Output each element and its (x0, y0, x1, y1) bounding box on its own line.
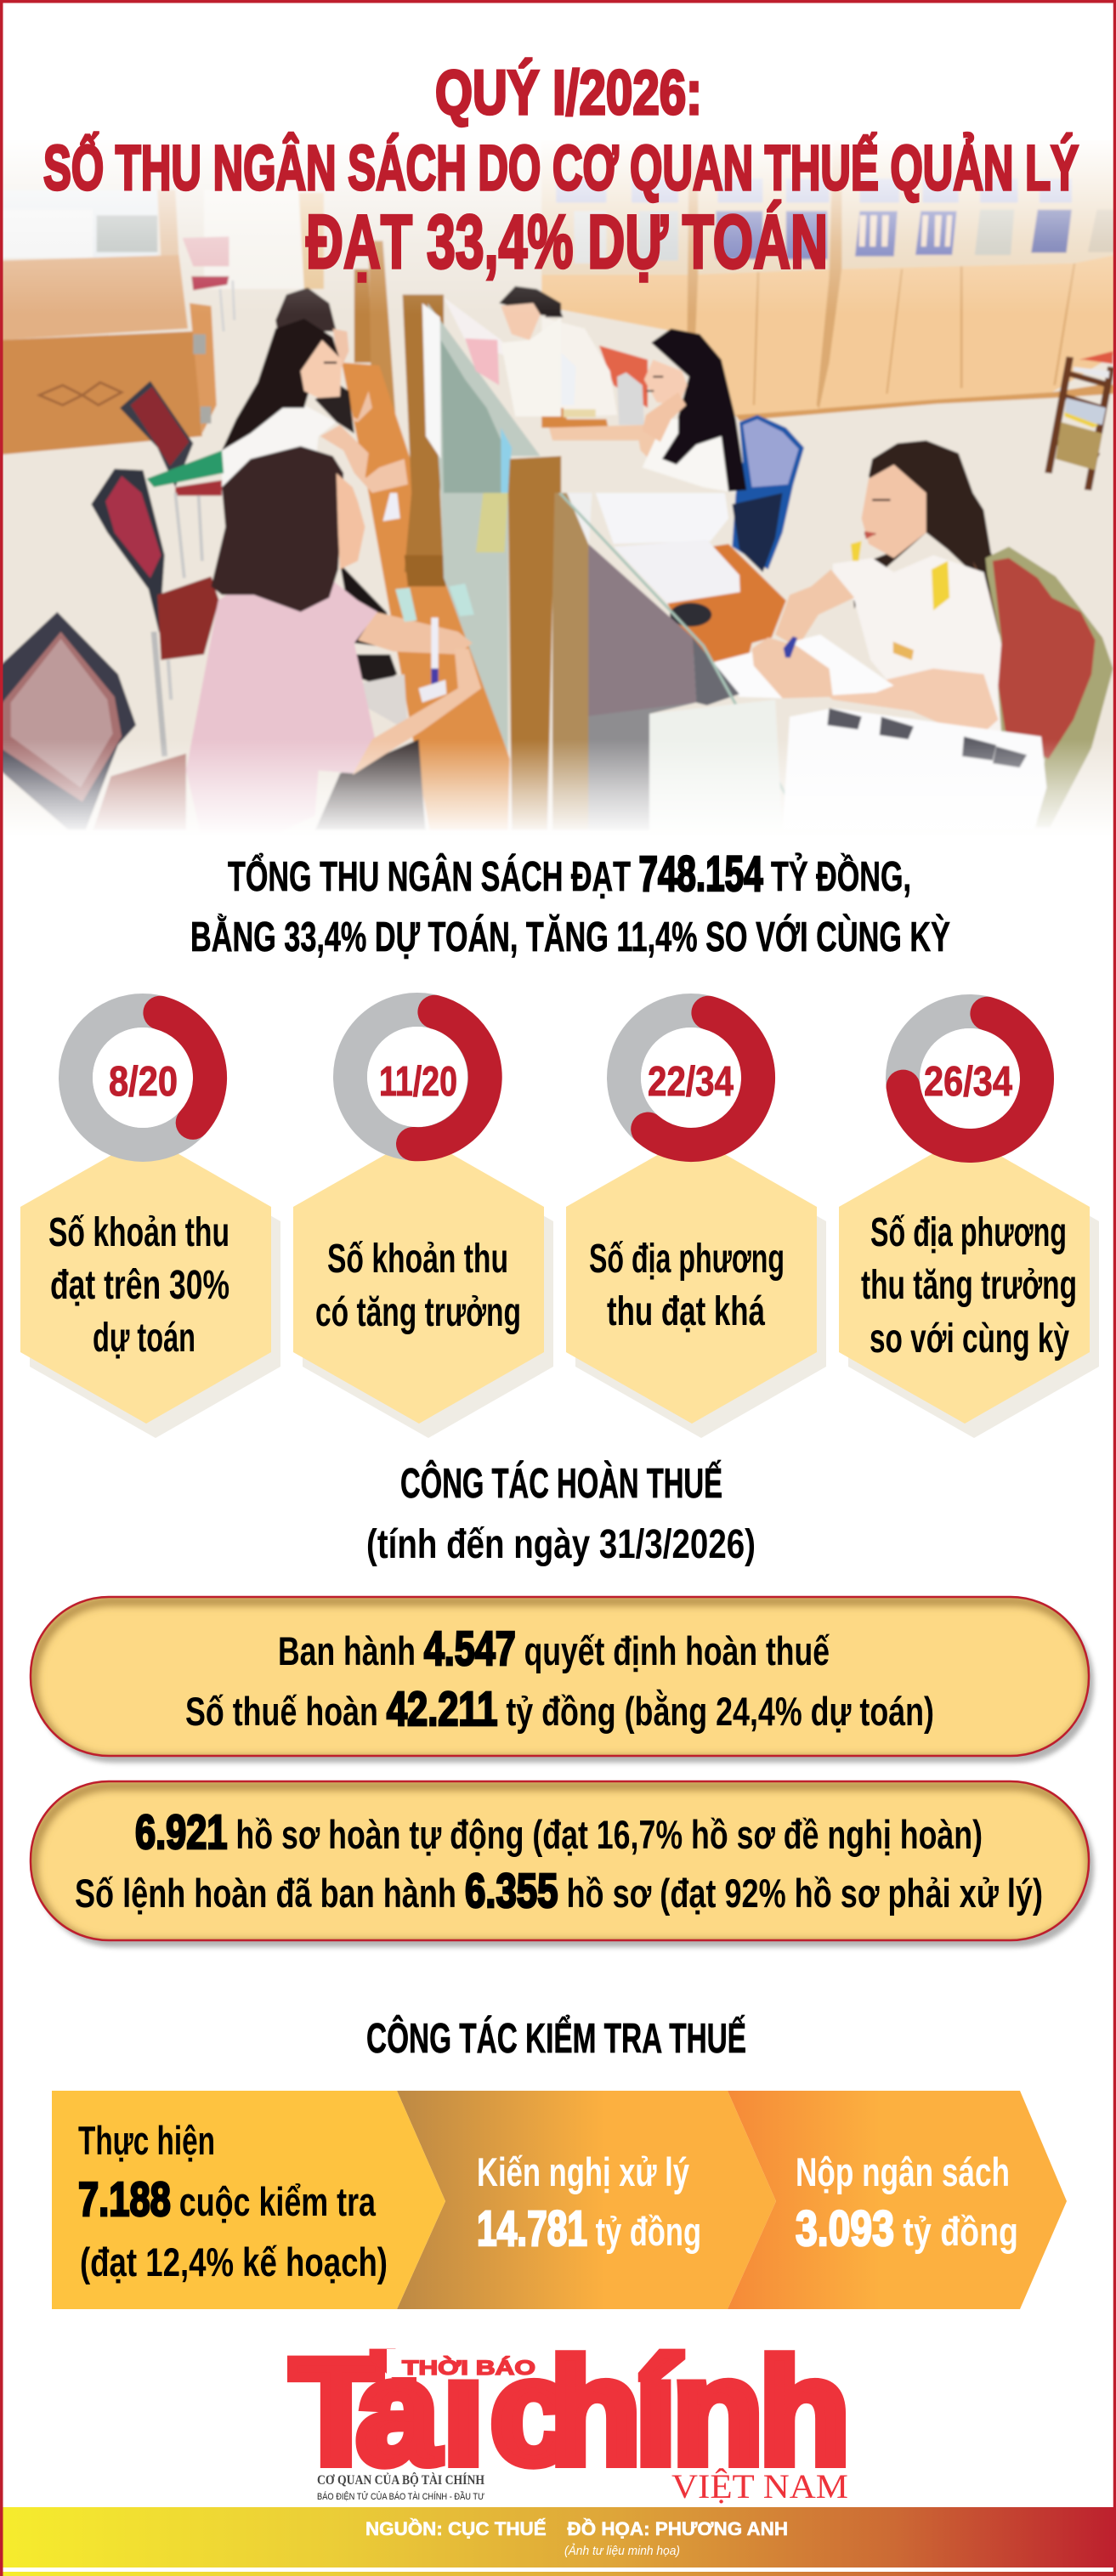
counter: wooden reception desk (0, 255, 217, 455)
person: woman at back (275, 287, 372, 433)
papers clipped to front glass (649, 699, 1046, 830)
donut 11/20: 11/20 (379, 1059, 457, 1105)
panel text (185, 1622, 934, 1736)
donut 8/20: 8/20 (109, 1059, 178, 1105)
photo note: (Ảnh tư liệu minh họa) (564, 2543, 680, 2558)
hexagon (20, 1135, 271, 1424)
item: side shelf (1048, 351, 1113, 490)
title (43, 59, 1079, 284)
card text (861, 1210, 1077, 1362)
arrow text: 3.093 tỷ đồng (796, 2201, 1018, 2256)
card text (589, 1237, 785, 1334)
hexagon shadow (30, 1150, 280, 1438)
logo: Thời báo Tài chính Việt Nam: VIỆT NAM (671, 2467, 848, 2505)
arrow text: (đạt 12,4% kế hoạch) (80, 2239, 388, 2284)
arrow: recommended amount (second step) (397, 2091, 776, 2309)
chair: first chair (120, 381, 224, 578)
front wooden post (508, 456, 561, 830)
card text: dự toán (93, 1316, 195, 1361)
card text: Số địa phương (589, 1237, 785, 1282)
hexagon (839, 1135, 1090, 1424)
panel: automatic refund records (31, 1781, 1094, 1947)
footer credits: NGUỒN: CỤC THUẾ ĐỒ HỌA: PHƯƠNG ANH (365, 2518, 788, 2539)
arrow text (477, 2149, 701, 2256)
person: staff at back (541, 299, 617, 427)
hexagon (293, 1135, 544, 1424)
footer band (3, 2507, 1116, 2576)
person: tax officer facing left (775, 440, 1012, 739)
title: QUÝ I/2026: (435, 59, 702, 127)
desk and papers (552, 493, 894, 699)
card text: Số khoản thu (48, 1210, 229, 1255)
chair: blue office chair (732, 415, 804, 572)
arrow text: Thực hiện (78, 2118, 215, 2163)
heading: tax inspection section: CÔNG TÁC KIỂM TRA THUẾ (366, 2015, 746, 2062)
heading: total revenue (190, 846, 950, 960)
hexagon shadow (303, 1150, 553, 1438)
card text: thu đạt khá (607, 1289, 765, 1334)
photo fade: top (0, 136, 1116, 314)
logo: Thời báo Tài chính Việt Nam: BÁO ĐIỆN TỬ CỦA BÁO TÀI CHÍNH - ĐẦU TƯ (317, 2491, 484, 2502)
person: woman in white blouse (222, 319, 408, 495)
arrow text: 14.781 tỷ đồng (477, 2201, 701, 2256)
hexagon (566, 1135, 817, 1424)
donut 8/20 (76, 1011, 210, 1145)
glass partition with monitor (552, 493, 801, 830)
arrow: inspections carried out (first step) (52, 2091, 445, 2309)
counter partition: rear post and glass (403, 295, 541, 754)
donut 11/20 (350, 1010, 485, 1144)
title: ĐẠT 33,4% DỰ TOÁN (306, 199, 828, 284)
chair: small red chair far left (183, 236, 235, 331)
arrow text (78, 2118, 388, 2284)
panel text: Số thuế hoàn 42.211 tỷ đồng (bằng 24,4% dự toán) (185, 1682, 934, 1736)
arrow text: 7.188 cuộc kiểm tra (78, 2172, 377, 2227)
card text: Số khoản thu (327, 1237, 508, 1282)
panel: refund decisions (31, 1597, 1094, 1763)
arrow text: Nộp ngân sách (796, 2149, 1010, 2194)
hexagon shadow (848, 1150, 1099, 1438)
card text: có tăng trưởng (315, 1290, 521, 1335)
donut 26/34 (903, 1011, 1037, 1146)
card: revenue items above 30% (20, 1011, 280, 1438)
chair: third chair with mesh back (0, 612, 186, 830)
chair: red chair with olive frame (985, 546, 1113, 827)
heading: total revenue: TỔNG THU NGÂN SÁCH ĐẠT 748.154 TỶ ĐỒNG, (228, 846, 911, 902)
card: localities with growth (839, 1011, 1099, 1438)
logo: Thời báo Tài chính Việt Nam: CƠ QUAN CỦA BỘ TÀI CHÍNH (317, 2471, 484, 2488)
heading: tax refund section: CÔNG TÁC HOÀN THUẾ (400, 1460, 722, 1507)
arrow: paid to budget (third step) (728, 2091, 1067, 2309)
logo: Thời báo Tài chính Việt Nam: THỜI BÁO (402, 2356, 535, 2380)
panel text (75, 1805, 1043, 1918)
donut 22/34 (624, 1011, 758, 1145)
heading: tax refund section: (tính đến ngày 31/3/2026) (366, 1522, 756, 1567)
photo fade: bottom (0, 739, 1116, 837)
person: young woman with long hair (549, 329, 746, 493)
donut 26/34: 26/34 (924, 1059, 1012, 1105)
card text (315, 1237, 521, 1335)
photo: tax office service counter (0, 136, 1116, 854)
desk surface (342, 363, 510, 830)
card: revenue items growing (293, 1010, 553, 1438)
logo: Thời báo Tài chính Việt Nam: Tài chính (291, 2330, 850, 2495)
arrow text (796, 2149, 1018, 2256)
panel text: Ban hành 4.547 quyết định hoàn thuế (278, 1622, 830, 1676)
card text (48, 1210, 229, 1361)
card: localities with good revenue (566, 1011, 826, 1438)
person: woman in pink blouse (186, 446, 481, 833)
donut 22/34: 22/34 (648, 1059, 734, 1105)
items: notes and pens on desk (382, 493, 474, 703)
arrow text: Kiến nghị xử lý (477, 2149, 689, 2194)
card text: đạt trên 30% (50, 1263, 229, 1308)
heading: tax refund section (366, 1460, 756, 1567)
person: staff head far right of partition (499, 286, 561, 416)
chair: second chair (91, 469, 219, 756)
hexagon shadow (575, 1150, 826, 1438)
